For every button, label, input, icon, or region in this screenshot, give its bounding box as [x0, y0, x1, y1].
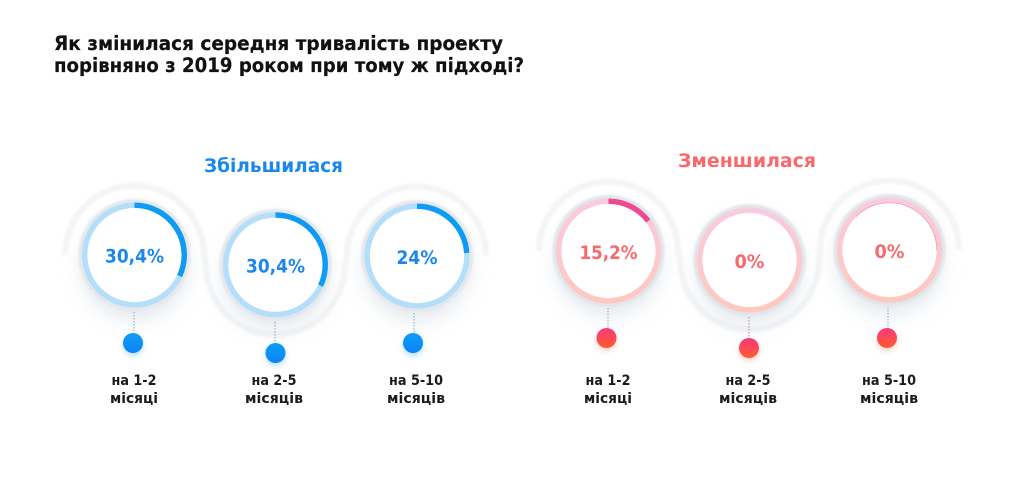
- wavy halo: increased group: [65, 186, 486, 334]
- value: 30,4%: [246, 256, 305, 278]
- gauge: decreased 2-5 months: [694, 204, 806, 326]
- title: [54, 32, 524, 77]
- connector and dot: decreased 2-5 months: [739, 317, 759, 361]
- connector and dot: increased 5-10 months: [403, 313, 423, 356]
- title: порівняно з 2019 роком при тому ж підході?: [54, 54, 524, 77]
- connector and dot: increased 2-5 months: [266, 322, 286, 366]
- gauge: decreased 5-10 months: [834, 194, 946, 316]
- progress arc: [134, 205, 184, 276]
- connector and dot: decreased 1-2 months: [596, 308, 616, 351]
- label: increased 2-5 months: [245, 373, 303, 407]
- label: decreased 2-5 months: [719, 373, 777, 407]
- label: decreased 2-5 months: місяців: [719, 391, 777, 407]
- label: increased 1-2 months: на 1-2: [112, 373, 156, 389]
- value: 0%: [874, 241, 904, 263]
- connector and dot: decreased 5-10 months: [877, 307, 897, 351]
- heading: decreased: Зменшилася: [678, 150, 816, 172]
- label: decreased 2-5 months: на 2-5: [726, 373, 770, 389]
- label: increased 5-10 months: [387, 373, 445, 407]
- label: increased 5-10 months: місяців: [387, 391, 445, 407]
- wavy halo: decreased group: [539, 181, 959, 330]
- label: decreased 5-10 months: [860, 373, 918, 407]
- label: increased 5-10 months: на 5-10: [389, 373, 443, 389]
- heading: increased: Збільшилася: [204, 155, 343, 177]
- label: decreased 1-2 months: [584, 373, 632, 407]
- value: 15,2%: [580, 242, 638, 264]
- value: 24%: [396, 247, 438, 269]
- label: increased 1-2 months: [110, 373, 158, 407]
- progress arc: [608, 201, 648, 221]
- gauge: decreased 1-2 months: [552, 195, 664, 317]
- value: 30,4%: [105, 246, 164, 268]
- title: Як змінилася середня тривалість проекту: [54, 32, 503, 55]
- label: increased 1-2 months: місяці: [110, 391, 158, 407]
- progress arc: [276, 215, 325, 286]
- label: increased 2-5 months: на 2-5: [252, 373, 296, 389]
- connector and dot: increased 1-2 months: [123, 312, 143, 356]
- value: 0%: [734, 251, 764, 273]
- gauge: increased 1-2 months: [78, 199, 190, 321]
- gauge: increased 5-10 months: [361, 200, 473, 322]
- label: decreased 1-2 months: місяці: [584, 391, 632, 407]
- gauge: increased 2-5 months: [220, 209, 332, 331]
- label: decreased 5-10 months: на 5-10: [862, 373, 916, 389]
- progress arc: [417, 206, 467, 253]
- label: increased 2-5 months: місяців: [245, 391, 303, 407]
- label: decreased 5-10 months: місяців: [860, 391, 918, 407]
- label: decreased 1-2 months: на 1-2: [586, 373, 630, 389]
